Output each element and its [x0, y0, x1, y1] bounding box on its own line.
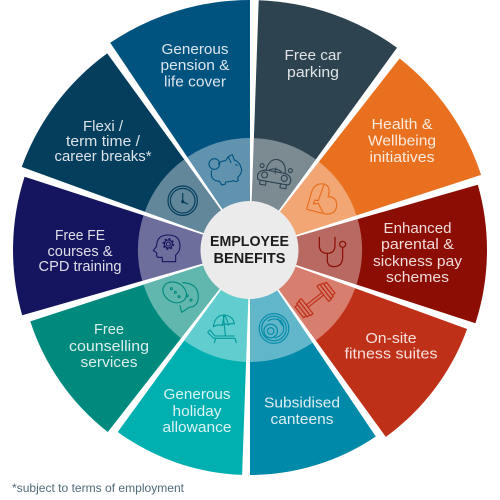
label: generous pension and life cover: Generous: [162, 41, 228, 58]
icon: clock: [168, 186, 197, 215]
panel: enhanced parental and sickness pay: [250, 185, 487, 323]
label: free car parking: parking: [287, 64, 339, 81]
icon: plate of food: [259, 314, 289, 343]
panel: generous pension and life cover: [110, 0, 250, 250]
label: generous holiday allowance: holiday: [172, 403, 222, 420]
label: health and wellbeing: Health &: [372, 116, 432, 133]
label: on-site fitness suites: fitness suites: [344, 346, 438, 362]
icon: stethoscope: [319, 237, 346, 267]
icon: piggy bank: [209, 155, 242, 185]
label: generous holiday allowance: Generous: [164, 386, 230, 403]
icon: dumbbell: [293, 280, 337, 320]
panel: generous holiday allowance: [118, 250, 250, 475]
panel: health and wellbeing initiatives: [250, 58, 481, 250]
label: generous holiday allowance: allowance: [162, 419, 232, 436]
label: free FE courses and CPD training: CPD training: [38, 258, 122, 275]
panel: free car parking: [250, 0, 397, 250]
label: free car parking: Free car: [284, 47, 342, 64]
label: generous pension and life cover: pension &: [160, 57, 230, 74]
label: flexi term time career breaks: Flexi /: [83, 118, 124, 135]
label: free FE courses and CPD training: courses &: [48, 243, 112, 260]
label: subsidised canteens: Subsidised: [264, 394, 340, 412]
label: on-site fitness suites: On-site: [366, 330, 416, 347]
label: flexi term time career breaks: career breaks*: [54, 148, 152, 165]
label: subsidised canteens: canteens: [270, 411, 334, 428]
panel: free counselling services: [30, 250, 250, 432]
icon: speech bubbles: [159, 278, 198, 312]
label: generous pension and life cover: life cover: [164, 74, 226, 90]
icon: parasol and sun lounger: [208, 315, 236, 343]
centre hub: employee benefits: [200, 201, 298, 299]
icon: car: [256, 157, 294, 189]
centre hub: employee benefits: BENEFITS: [214, 250, 286, 267]
panel: on-site fitness suites: [250, 250, 467, 437]
footnote: *subject to terms of employment: [12, 481, 185, 495]
label: enhanced parental and sickness pay schemes: Enhanced: [384, 220, 452, 237]
icon: broken heart: [307, 184, 337, 214]
label: free counselling services: Free: [94, 321, 124, 338]
label: enhanced parental and sickness pay schemes: parental &: [381, 236, 454, 253]
label: free counselling services: counselling: [69, 338, 149, 355]
label: enhanced parental and sickness pay schemes: schemes: [386, 269, 449, 286]
label: free FE courses and CPD training: Free FE: [55, 227, 105, 244]
label: enhanced parental and sickness pay schemes: sickness pay: [373, 253, 463, 270]
panel: subsidised canteens: [250, 250, 376, 475]
centre hub: employee benefits: EMPLOYEE: [210, 233, 289, 250]
label: free counselling services: services: [80, 354, 138, 371]
panel: flexi term time career breaks: [22, 53, 250, 250]
label: flexi term time career breaks: term time /: [66, 133, 141, 150]
label: health and wellbeing: Wellbeing: [368, 132, 436, 150]
label: health and wellbeing: initiatives: [370, 149, 434, 166]
icon: head with gear: [153, 235, 180, 262]
panel: free FE courses and CPD training: [13, 177, 250, 315]
